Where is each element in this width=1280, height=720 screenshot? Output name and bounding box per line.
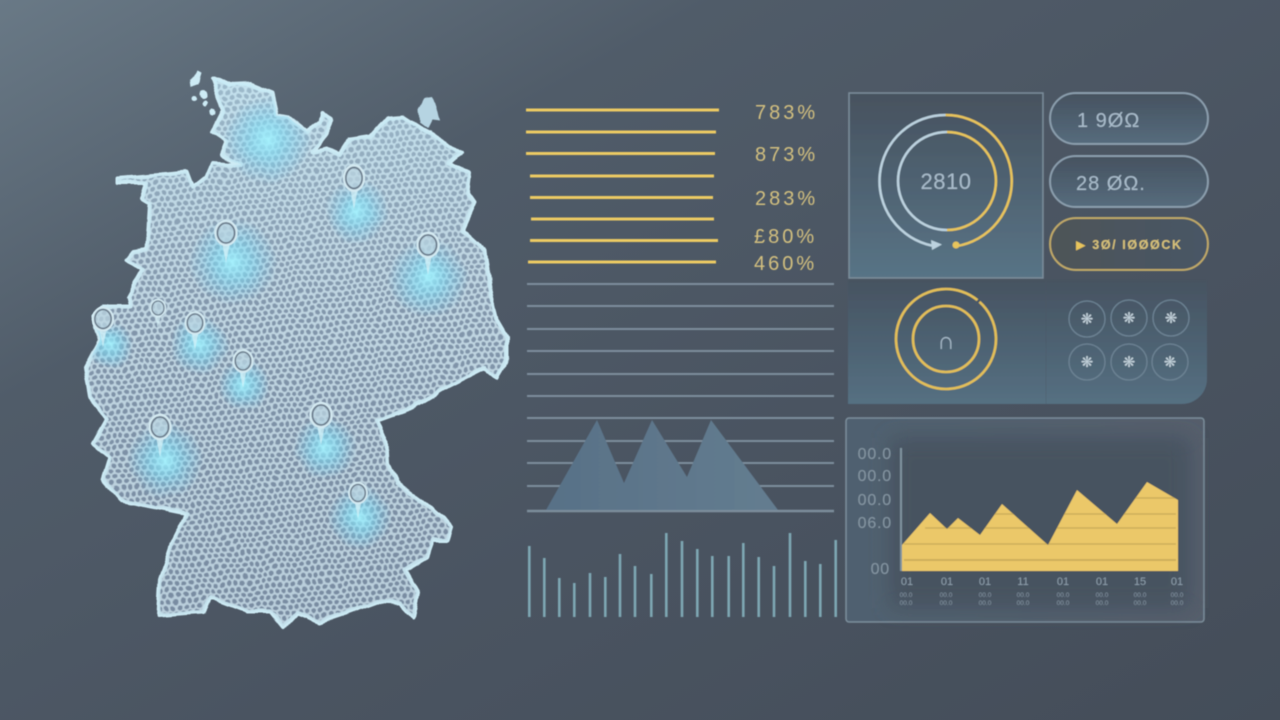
grid lines — [527, 284, 834, 511]
pill buttons — [1050, 93, 1208, 270]
panel: icon grid — [1046, 280, 1207, 404]
x axis sublabels: 00.0 — [979, 600, 992, 607]
yellow percentage lines — [526, 102, 818, 275]
panel: yellow area chart — [846, 418, 1204, 622]
pill: first value — [1050, 93, 1208, 144]
y axis labels — [858, 446, 892, 578]
percentage values — [754, 102, 818, 275]
x axis sublabels — [900, 592, 1184, 607]
x axis sublabels: 00.0 — [900, 600, 913, 607]
y axis — [900, 448, 902, 571]
x axis labels: 15 — [1134, 576, 1146, 588]
x axis sublabels: 00.0 — [1096, 592, 1109, 599]
icon circles — [1069, 300, 1189, 380]
icon glyphs: ❋ — [1164, 354, 1176, 371]
icon glyphs: ❋ — [1081, 354, 1093, 371]
icon glyphs: ❋ — [1123, 310, 1135, 327]
x axis labels: 01 — [941, 576, 953, 588]
percentage values: £80% — [754, 226, 817, 248]
x axis sublabels: 00.0 — [940, 592, 953, 599]
mountain area chart with grid lines — [527, 284, 834, 511]
panel: main gauge — [849, 93, 1043, 278]
x axis sublabels: 00.0 — [1134, 592, 1147, 599]
percentage values: 460% — [754, 253, 817, 275]
percentage values: 873% — [755, 144, 818, 166]
icon glyphs: ❋ — [1123, 354, 1135, 371]
gauge rings — [880, 115, 1012, 246]
percentage values: 783% — [755, 102, 818, 124]
percentage values: 283% — [755, 188, 818, 210]
location pins — [93, 165, 439, 518]
x axis labels: 01 — [1171, 576, 1183, 588]
y axis labels: 00.0 — [858, 446, 892, 463]
y axis labels: 06.0 — [858, 515, 892, 532]
x axis labels: 01 — [979, 576, 991, 588]
pill: second value: 28 ØΩ. — [1076, 173, 1146, 195]
x axis sublabels: 00.0 — [1134, 600, 1147, 607]
x axis sublabels: 00.0 — [979, 592, 992, 599]
x axis sublabels: 00.0 — [1057, 592, 1070, 599]
x axis labels: 11 — [1017, 576, 1029, 588]
x axis labels: 01 — [901, 576, 913, 588]
x axis sublabels: 00.0 — [1096, 600, 1109, 607]
y axis labels: 00.0 — [858, 468, 892, 485]
x axis labels: 01 — [1096, 576, 1108, 588]
x axis sublabels: 00.0 — [1057, 600, 1070, 607]
x axis labels: 01 — [1057, 576, 1069, 588]
x axis sublabels: 00.0 — [1017, 592, 1030, 599]
vertical bar chart — [529, 533, 836, 617]
y axis labels: 00.0 — [858, 492, 892, 509]
map outline with dot mesh and glow — [80, 70, 510, 630]
inner plot shade — [890, 438, 1190, 608]
x axis sublabels: 00.0 — [940, 600, 953, 607]
x axis sublabels: 00.0 — [1171, 600, 1184, 607]
yellow area — [902, 482, 1178, 571]
x axis sublabels: 00.0 — [900, 592, 913, 599]
x axis labels — [901, 576, 1183, 588]
y axis labels: 00 — [871, 561, 890, 578]
pill: second value — [1050, 156, 1208, 207]
area grid lines — [904, 498, 1176, 560]
x axis sublabels: 00.0 — [1017, 600, 1030, 607]
arrow head and dot — [931, 240, 960, 250]
pill: first value: 1 9ØΩ — [1077, 110, 1140, 132]
map of Germany — [80, 70, 510, 630]
double ring — [875, 268, 1017, 410]
triangle peaks — [546, 420, 778, 510]
gauge value: 2810 — [921, 169, 971, 194]
icon glyphs — [1081, 310, 1177, 371]
yellow lines — [526, 110, 719, 262]
x axis sublabels: 00.0 — [1171, 592, 1184, 599]
pill: highlighted action: ▶ 3Ø/ IØØØCK — [1076, 238, 1183, 252]
panel: small gauge — [848, 268, 1046, 410]
pill: highlighted action — [1050, 218, 1208, 270]
ring value: ∩ — [937, 328, 955, 355]
icon glyphs: ❋ — [1165, 310, 1177, 327]
icon glyphs: ❋ — [1081, 311, 1093, 328]
